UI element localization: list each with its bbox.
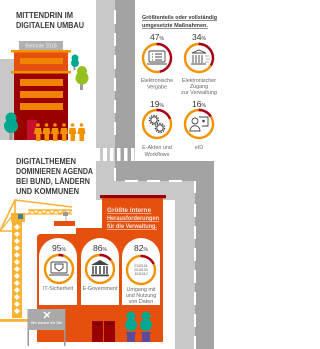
stat: Elektronischer Zugang zur Verwaltung 34%: Zugang <box>190 84 208 90</box>
heading: Mittendrin im digitalen Umbau: MITTENDRIN IM <box>16 10 73 20</box>
stat: Elektronischer Zugang zur Verwaltung 34%: 34% <box>192 32 207 42</box>
trees <box>4 54 88 140</box>
heading: Digitalthemen: BEI BUND, LÄNDERN <box>16 176 90 186</box>
heading: Mittendrin im digitalen Umbau: DIGITALEN UMBAU <box>16 20 84 30</box>
stat: Elektronischer Zugang zur Verwaltung 34%: Elektronischer <box>182 78 216 84</box>
stat: E-Akten und Workflows 19%: 19% <box>150 99 165 109</box>
illustration: Behörde building <box>0 41 71 140</box>
card: E-Government 86%: E-Government <box>82 286 118 292</box>
stat: Elektronische Vergabe 47%: Vergabe <box>147 84 167 90</box>
card: Umgang mit und Nutzung von Daten 82%: 82% <box>134 243 149 253</box>
people <box>34 123 86 141</box>
sign: Wir bauen für Sie: Wir bauen für Sie <box>31 321 62 325</box>
stat: eID 16%: 16% <box>192 99 207 109</box>
heading: Mittendrin im digitalen Umbau <box>16 10 84 30</box>
doors <box>92 321 115 342</box>
illustration: crane <box>0 200 75 322</box>
illustration: Behörde building: Behörde 2018 <box>25 44 57 50</box>
panel: implemented measures <box>141 15 218 158</box>
callout heading: für die Verwaltung. <box>107 224 157 230</box>
subheading: Größtenteils oder vollständig <box>142 15 218 21</box>
heading: Digitalthemen: DOMINIEREN AGENDA <box>16 166 93 176</box>
stat: Elektronische Vergabe 47%: 47% <box>150 32 165 42</box>
card: IT-Sicherheit 95% <box>39 238 77 305</box>
stat: Elektronischer Zugang zur Verwaltung 34% <box>181 32 217 96</box>
callout heading: Größte interne <box>107 208 152 214</box>
card: Umgang mit und Nutzung von Daten 82%: 0100101 <box>134 264 148 268</box>
heading: Digitalthemen: DIGITALTHEMEN <box>16 156 76 166</box>
road network <box>96 0 214 349</box>
card: Umgang mit und Nutzung von Daten 82%: Umgang mit <box>126 287 156 293</box>
card: Umgang mit und Nutzung von Daten 82%: von Daten <box>129 299 153 305</box>
subheading: umgesetzte Maßnahmen. <box>142 23 208 29</box>
card: Umgang mit und Nutzung von Daten 82% <box>122 238 160 305</box>
card: IT-Sicherheit 95%: 95% <box>52 243 67 253</box>
stat: Elektronischer Zugang zur Verwaltung 34%: zur Verwaltung <box>181 90 217 96</box>
stat: E-Akten und Workflows 19%: E-Akten und <box>142 145 172 151</box>
card: Umgang mit und Nutzung von Daten 82%: 1011010 <box>135 272 148 276</box>
sign: Wir bauen für Sie <box>28 309 66 346</box>
potted plants <box>125 312 152 342</box>
card: Umgang mit und Nutzung von Daten 82%: und Nutzung <box>126 293 156 299</box>
callout heading: Herausforderungen <box>107 216 159 222</box>
stat: eID 16% <box>185 99 213 151</box>
stat: Elektronische Vergabe 47% <box>141 32 173 90</box>
callout heading <box>107 208 159 230</box>
card: Umgang mit und Nutzung von Daten 82%: 0010100 <box>134 268 148 272</box>
card: E-Government 86% <box>81 238 119 305</box>
heading: Digitalthemen: UND KOMMUNEN <box>16 186 79 196</box>
card: E-Government 86%: 86% <box>93 243 108 253</box>
stat: Elektronische Vergabe 47%: Elektronische <box>141 78 173 84</box>
stat: eID 16%: eID <box>195 145 203 151</box>
subheading <box>142 15 218 29</box>
panel: internal challenges building <box>37 195 166 342</box>
card: IT-Sicherheit 95%: IT-Sicherheit <box>43 286 74 292</box>
stat: E-Akten und Workflows 19%: Workflows <box>145 152 170 158</box>
stat: E-Akten und Workflows 19% <box>142 99 172 158</box>
heading: Digitalthemen <box>16 156 93 196</box>
